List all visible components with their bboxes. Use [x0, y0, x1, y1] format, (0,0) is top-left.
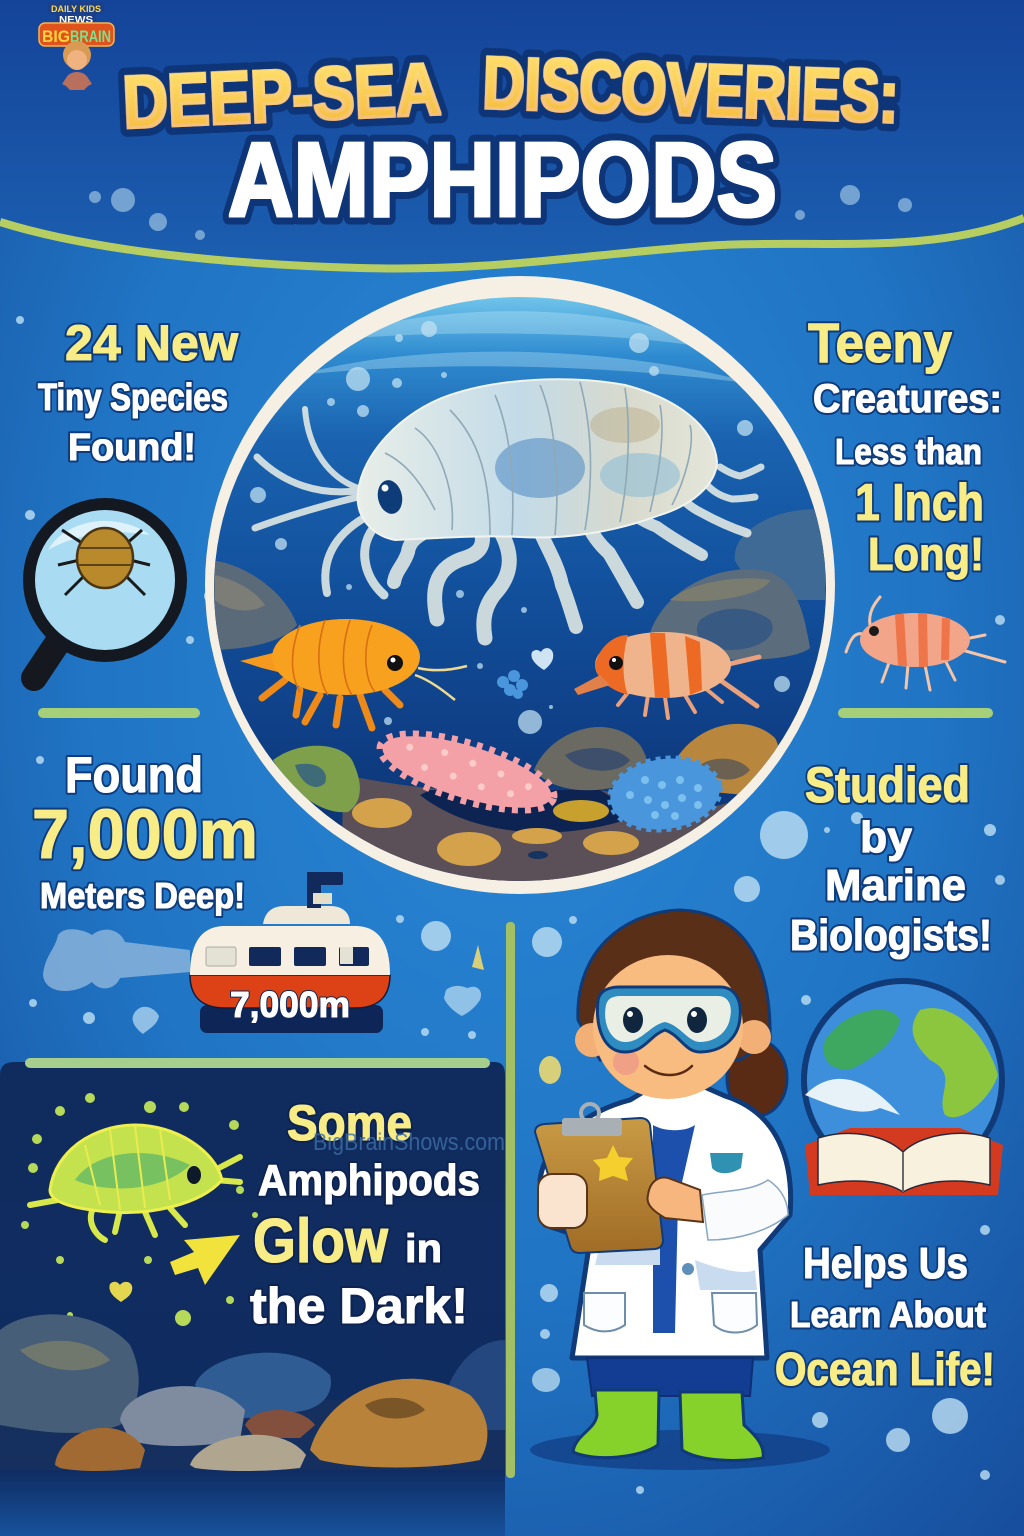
- logo: Daily Kids News Big Brain: BIG: [42, 27, 70, 46]
- rock upper right: [735, 509, 825, 600]
- text: teeny creatures: Teeny: [808, 311, 952, 374]
- badge: [710, 1153, 743, 1173]
- body: [358, 379, 717, 540]
- pebbles: [352, 798, 639, 866]
- watermark: BigBrainShows.com: [313, 1129, 505, 1156]
- text: found 7000 meters deep: [32, 747, 258, 916]
- text: teeny creatures: Creatures:: [813, 377, 1002, 421]
- icon: small pink amphipod: [846, 597, 1005, 690]
- small blue cluster and heart: [497, 648, 553, 699]
- text: some amphipods glow in the dark: in: [405, 1227, 442, 1271]
- arrow: [170, 1235, 240, 1285]
- text: teeny creatures: 1 Inch: [855, 474, 984, 532]
- text: studied by marine biologists: [790, 757, 992, 960]
- ground shadow: [530, 1430, 830, 1470]
- text: helps us learn about ocean life: Helps Us: [803, 1239, 968, 1288]
- blue coral: [606, 752, 724, 836]
- porthole ring: [205, 276, 835, 894]
- glowing amphipod: [30, 1125, 240, 1240]
- ponytail: [727, 1040, 787, 1116]
- title line 2: AMPHIPODS: [228, 121, 777, 239]
- icon: magnifying glass with bug: [23, 498, 187, 678]
- eye: [375, 478, 405, 516]
- goggles: [597, 987, 740, 1052]
- segment lines: [385, 382, 691, 535]
- text: found 7000 meters deep: Found: [65, 747, 203, 803]
- header bubbles: [89, 185, 912, 240]
- glow dots: [21, 1093, 258, 1326]
- antennae and legs: [255, 409, 761, 638]
- text: helps us learn about ocean life: [775, 1239, 995, 1395]
- seabed: [342, 778, 728, 881]
- text: studied by marine biologists: Studied: [805, 757, 970, 813]
- text: studied by marine biologists: Biologists!: [790, 911, 992, 960]
- clipboard: [535, 1104, 663, 1253]
- light rays: [314, 311, 736, 382]
- right hand: [647, 1178, 703, 1222]
- hair: [578, 910, 770, 1060]
- text: some amphipods glow in the dark: Some: [287, 1095, 412, 1151]
- rock orange: [670, 724, 779, 795]
- open book: [805, 1128, 1003, 1195]
- text: teeny creatures: Less than: [835, 431, 982, 472]
- icon: research ship: [43, 872, 390, 1033]
- panel: central porthole: [205, 276, 835, 894]
- icon: research ship: 7,000m: [230, 984, 350, 1025]
- red striped amphipod: [574, 632, 759, 718]
- text: 24 new tiny species found: Found!: [68, 427, 196, 469]
- face: [593, 955, 743, 1099]
- water bubbles: [250, 321, 790, 734]
- coat shading: [595, 1245, 757, 1290]
- text: helps us learn about ocean life: Ocean Life!: [775, 1343, 995, 1395]
- divider horizontal: [25, 1058, 490, 1068]
- logo: Daily Kids News Big Brain: [39, 2, 114, 90]
- text: found 7000 meters deep: Meters Deep!: [40, 875, 245, 916]
- divider vertical: [506, 922, 515, 1478]
- panel background: [0, 1062, 505, 1536]
- divider right: [838, 708, 993, 718]
- logo: Daily Kids News Big Brain: BRAIN: [70, 27, 111, 46]
- text: some amphipods glow in the dark: [250, 1095, 480, 1334]
- sleeve: [702, 1180, 788, 1240]
- seabed rocks: [0, 1314, 505, 1471]
- logo: Daily Kids News Big Brain: DAILY KIDS: [51, 4, 101, 15]
- boots: [573, 1390, 659, 1458]
- text: 24 new tiny species found: [38, 315, 238, 469]
- text: some amphipods glow in the dark: Amphipods: [258, 1156, 480, 1205]
- orange amphipod: [240, 619, 467, 728]
- divider left: [38, 708, 200, 718]
- main translucent amphipod: [255, 379, 761, 638]
- scattered bubbles: [16, 316, 1005, 1494]
- text: studied by marine biologists: Marine: [825, 861, 966, 910]
- shirt: [653, 1125, 695, 1333]
- text: teeny creatures: Long!: [868, 528, 984, 580]
- illustration: marine biologist: [530, 910, 830, 1470]
- text: found 7000 meters deep: 7,000m: [32, 795, 258, 873]
- title line 1: DISCOVERIES:: [481, 41, 900, 139]
- rock green: [273, 746, 360, 812]
- text: helps us learn about ocean life: Learn About: [790, 1294, 986, 1335]
- trousers: [587, 1358, 753, 1396]
- porthole water: [214, 297, 826, 881]
- rock left: [214, 560, 297, 650]
- header band with wave: [0, 0, 1024, 269]
- text: some amphipods glow in the dark: the Dark!: [250, 1278, 468, 1334]
- title line 1: DEEP-SEA: [121, 47, 442, 144]
- neck: [650, 1085, 700, 1130]
- body shading: [495, 438, 585, 498]
- rock right: [648, 569, 810, 660]
- title line 1: [121, 41, 900, 144]
- rock brown-grey: [534, 727, 648, 790]
- ship exhaust plume: [43, 929, 190, 991]
- text: some amphipods glow in the dark: Glow: [253, 1207, 389, 1276]
- pockets: [584, 1293, 625, 1331]
- ears: [575, 1023, 609, 1057]
- logo: Daily Kids News Big Brain: NEWS: [59, 15, 93, 26]
- text: studied by marine biologists: by: [860, 813, 913, 862]
- panel: glow in the dark: [0, 1062, 505, 1536]
- sea cucumber: [373, 719, 561, 825]
- text: 24 new tiny species found: 24 New: [65, 315, 238, 371]
- text: teeny creatures: [808, 311, 1002, 580]
- left hand: [538, 1174, 587, 1228]
- icon: globe and open book: [801, 978, 1005, 1195]
- title: [121, 41, 900, 239]
- cheeks and smile: [613, 1049, 639, 1075]
- lab coat: [540, 1085, 791, 1358]
- text: 24 new tiny species found: Tiny Species: [38, 377, 228, 419]
